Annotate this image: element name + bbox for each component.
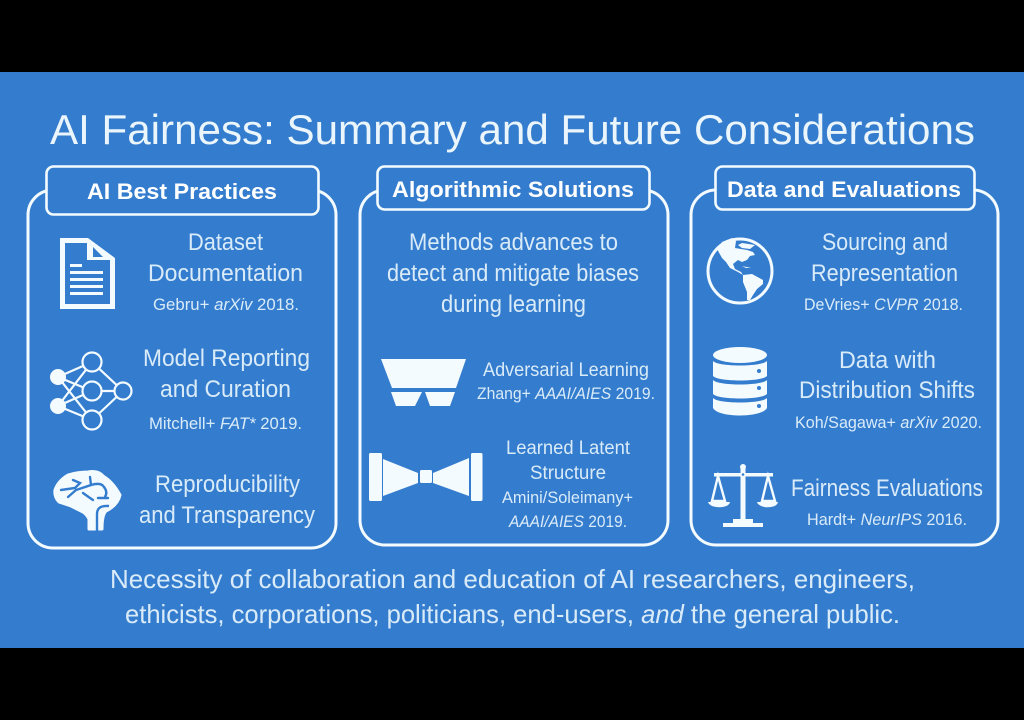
- text: distribution shifts: Koh/Sagawa+ arXiv 2020.: [795, 414, 982, 432]
- panel: Algorithmic Solutions: [360, 166, 668, 545]
- text: learned latent structure: Learned Latent: [506, 438, 631, 459]
- text: model reporting: Model Reporting: [143, 345, 310, 372]
- text: distribution shifts: Data with: [839, 347, 936, 374]
- text: dataset documentation: Dataset: [188, 229, 263, 256]
- text: learned latent structure: Amini/Soleimany+: [502, 489, 633, 507]
- text: sourcing: DeVries+ CVPR 2018.: [804, 296, 963, 314]
- panel: AI Best Practices: [28, 166, 336, 548]
- heading: Algorithmic Solutions: Algorithmic Solutions: [392, 177, 634, 202]
- heading: AI Best Practices: [46, 166, 318, 214]
- text: reproducibility: and Transparency: [139, 502, 315, 529]
- text: model reporting: and Curation: [160, 376, 291, 403]
- title: AI Fairness: Summary and Future Considerations: [50, 106, 975, 153]
- text: learned latent structure: [502, 438, 633, 531]
- text: learned latent structure: Structure: [530, 463, 606, 484]
- heading: Algorithmic Solutions: [378, 166, 650, 210]
- text: methods intro: Methods advances to: [409, 229, 618, 256]
- icon: brain: [55, 472, 120, 531]
- text: fairness evaluations: [791, 475, 983, 529]
- text: fairness evaluations: Hardt+ NeurIPS 2016.: [807, 511, 967, 529]
- icon: adversarial network: [381, 359, 466, 406]
- text: methods intro: [387, 229, 639, 318]
- text: adversarial learning: Adversarial Learning: [483, 360, 649, 381]
- text: learned latent structure: AAAI/AIES 2019.: [508, 513, 627, 531]
- text: dataset documentation: [148, 229, 303, 314]
- text: model reporting: [143, 345, 310, 433]
- text: sourcing: [804, 229, 963, 314]
- heading: Data and Evaluations: Data and Evaluations: [727, 177, 961, 202]
- text: distribution shifts: [795, 347, 982, 432]
- text: methods intro: detect and mitigate biases: [387, 260, 639, 287]
- footer text: Necessity of collaboration and education of AI researchers, engineers,: [110, 564, 915, 594]
- footer text: ethicists, corporations, politicians, end-users, and the general public.: [125, 599, 900, 629]
- icon: scales: [708, 464, 778, 527]
- text: methods intro: during learning: [441, 291, 586, 318]
- heading: Data and Evaluations: [716, 166, 974, 210]
- panel: Data and Evaluations: [691, 166, 998, 545]
- icon: autoencoder: [369, 453, 482, 501]
- icon: neural network: [50, 352, 132, 430]
- text: reproducibility: Reproducibility: [155, 471, 300, 498]
- text: dataset documentation: Gebru+ arXiv 2018.: [153, 296, 299, 314]
- text: fairness evaluations: Fairness Evaluations: [791, 475, 983, 502]
- text: sourcing: Sourcing and: [822, 229, 948, 256]
- footer text: [110, 564, 915, 629]
- text: adversarial learning: [477, 360, 655, 403]
- text: reproducibility: [139, 471, 315, 529]
- icon: document: [60, 238, 115, 309]
- text: dataset documentation: Documentation: [148, 260, 303, 287]
- icon: globe: [708, 238, 772, 303]
- text: sourcing: Representation: [811, 260, 958, 287]
- heading: AI Best Practices: AI Best Practices: [87, 179, 277, 204]
- text: adversarial learning: Zhang+ AAAI/AIES 2019.: [477, 385, 655, 403]
- icon: database: [713, 347, 767, 416]
- text: distribution shifts: Distribution Shifts: [799, 377, 975, 404]
- text: model reporting: Mitchell+ FAT* 2019.: [149, 415, 302, 433]
